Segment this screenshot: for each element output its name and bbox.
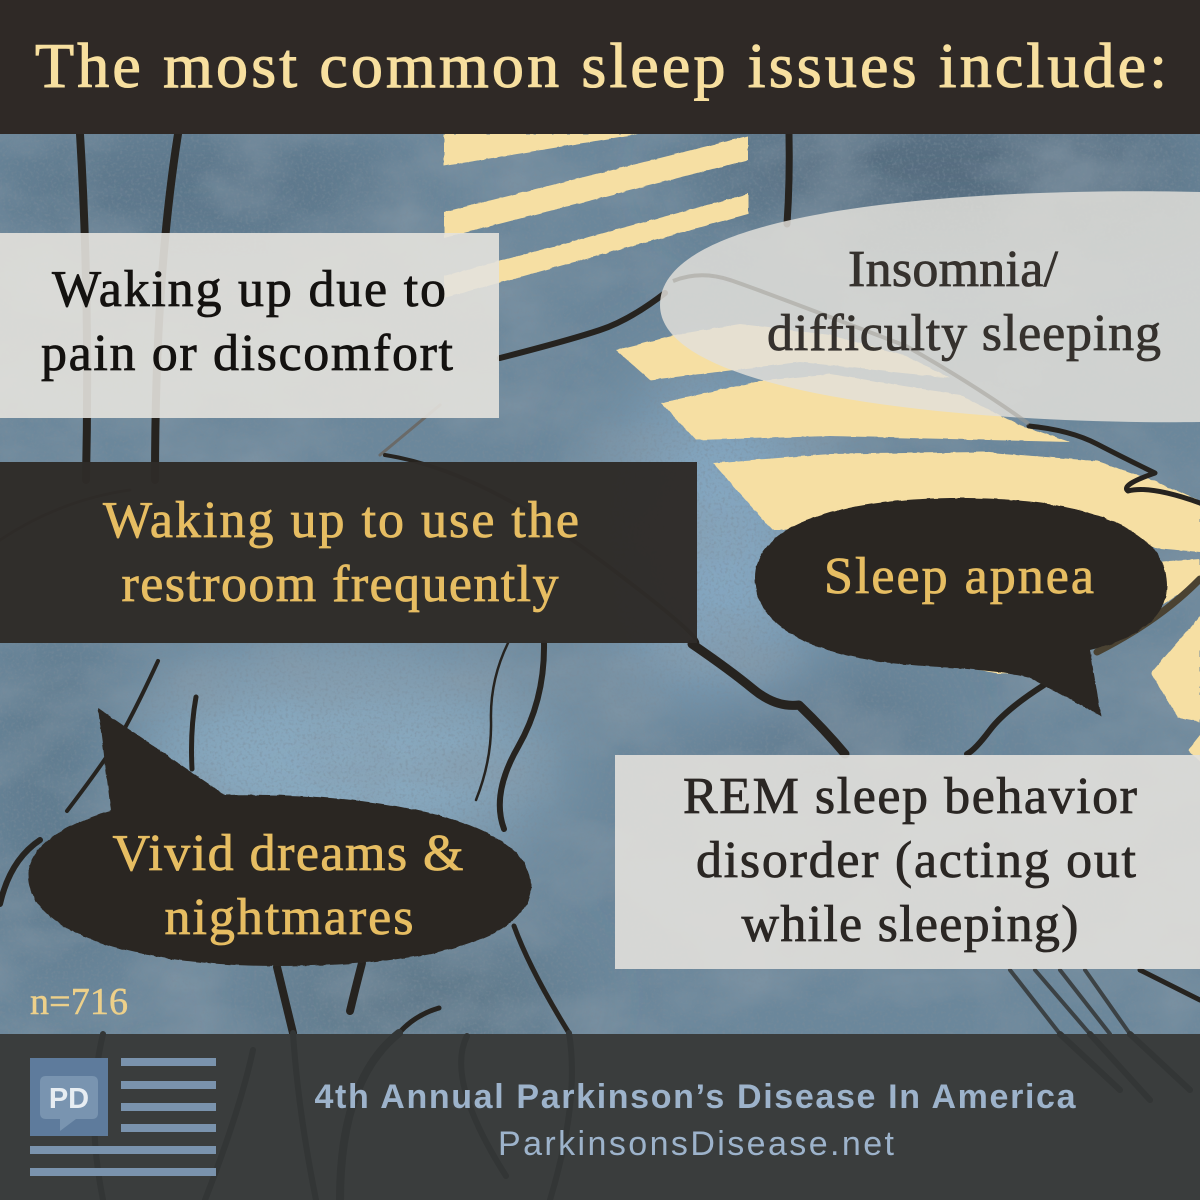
callout: REM sleep behavior disorder: REM sleep behavior xyxy=(683,768,1137,825)
callout: vivid dreams: Vivid dreams & xyxy=(112,825,464,882)
illustration: yellow stripes xyxy=(444,134,1200,762)
sample size: n=716 xyxy=(30,981,128,1023)
callout: waking up to use the restroom: restroom frequently xyxy=(122,556,558,613)
footer heading: 4th Annual Parkinson’s Disease In America xyxy=(314,1078,1077,1116)
callout: insomnia: difficulty sleeping xyxy=(767,305,1161,362)
callout: vivid dreams xyxy=(28,708,531,966)
callout: insomnia: Insomnia/ xyxy=(848,241,1059,298)
callout: REM sleep behavior disorder: disorder (acting out xyxy=(696,832,1137,889)
callout: REM sleep behavior disorder: while sleeping) xyxy=(742,896,1078,953)
callout: REM sleep behavior disorder xyxy=(615,755,1200,969)
faint cracks in footer xyxy=(94,1033,1190,1200)
callout: waking up to use the restroom: Waking up to use the xyxy=(103,492,579,549)
illustration: dark cracks xyxy=(0,134,1200,1034)
icon: PD logo xyxy=(30,1058,216,1176)
callout: sleep apnea xyxy=(755,498,1167,716)
callout: insomnia xyxy=(660,191,1200,424)
callout: waking up to use the restroom xyxy=(0,462,697,643)
callout: waking up due to pain: Waking up due to xyxy=(52,261,446,318)
callout: sleep apnea: Sleep apnea xyxy=(824,548,1094,605)
footer website: ParkinsonsDisease.net xyxy=(498,1125,895,1163)
ghost crack inside the bubble xyxy=(673,275,1029,424)
title: The most common sleep issues include: xyxy=(35,30,1167,101)
footer band xyxy=(0,1033,1200,1200)
title band xyxy=(0,0,1200,134)
icon: PD logo: PD xyxy=(49,1083,89,1115)
callout: vivid dreams: nightmares xyxy=(164,889,414,946)
callout: waking up due to pain: pain or discomfort xyxy=(41,325,454,382)
callout: waking up due to pain xyxy=(0,233,499,418)
